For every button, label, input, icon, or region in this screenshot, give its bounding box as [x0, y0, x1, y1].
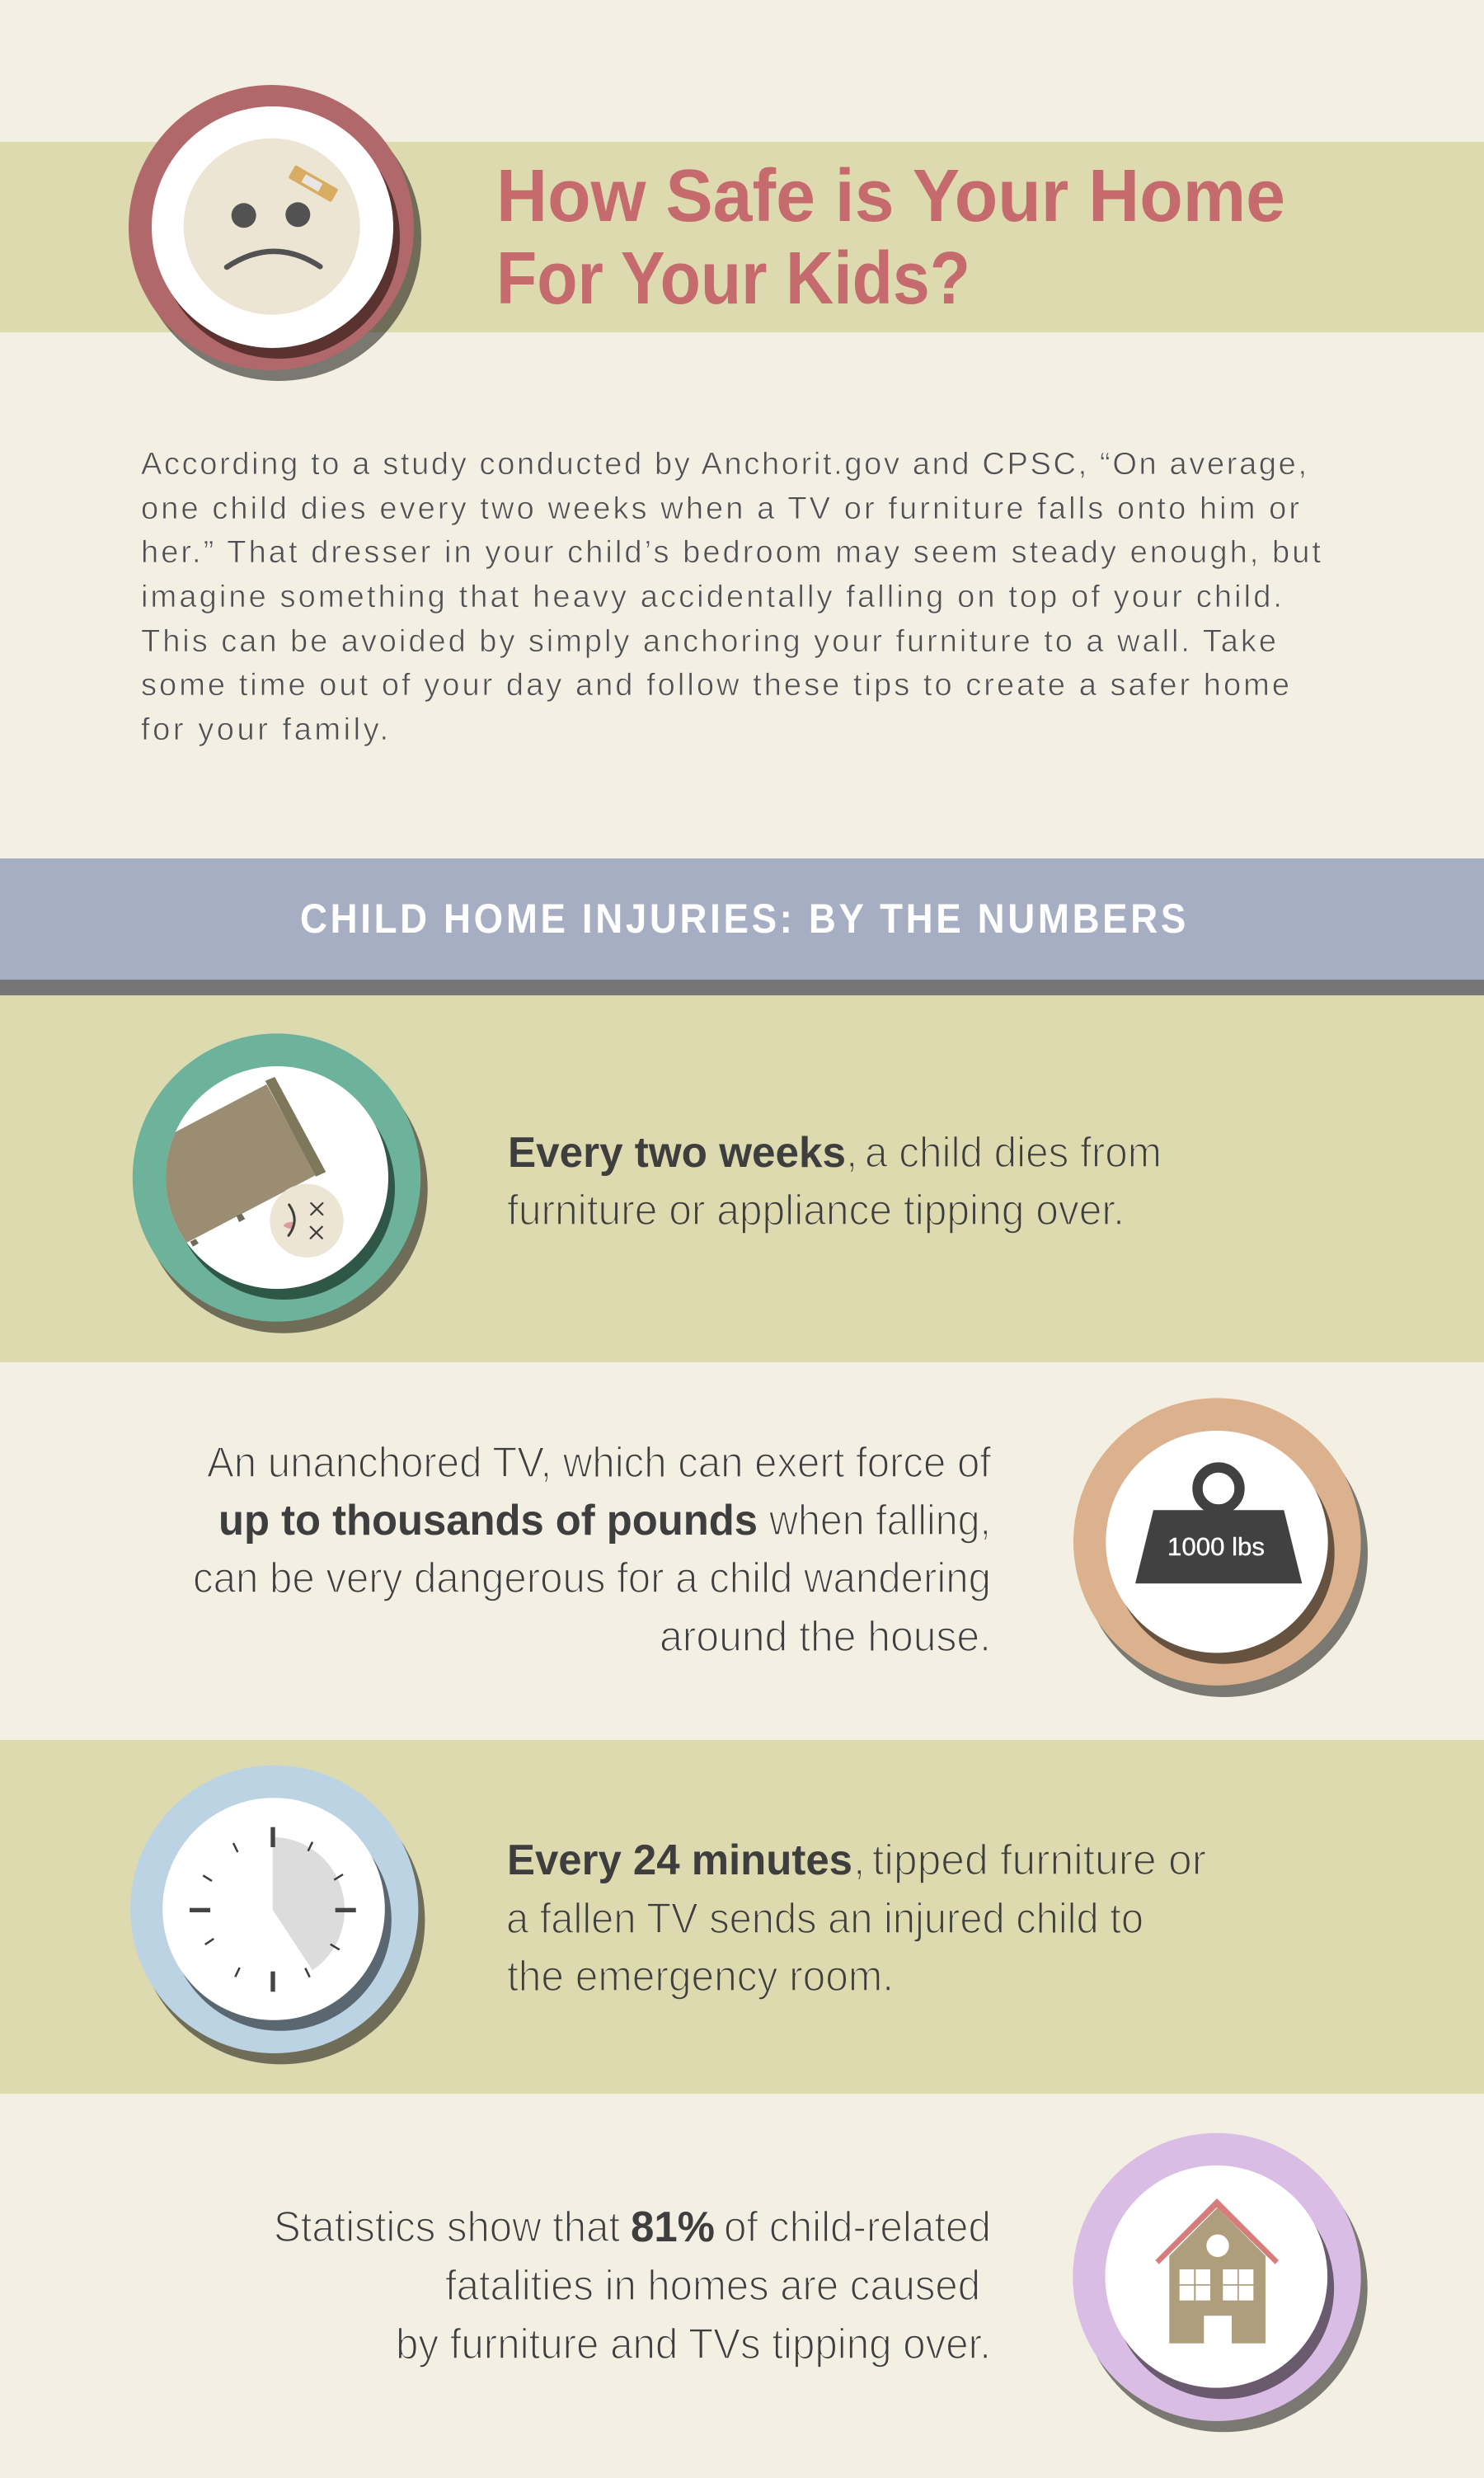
title	[496, 155, 1285, 320]
intro paragraph: one child dies every two weeks when a TV or furniture falls onto him or	[141, 491, 1299, 526]
section banner: CHILD HOME INJURIES: BY THE NUMBERS	[300, 896, 1189, 942]
text: every two weeks	[507, 1129, 1162, 1234]
text: every two weeks: furniture or appliance tipping over.	[507, 1187, 1125, 1234]
text: unanchored tv: when falling,	[768, 1497, 991, 1545]
text: every two weeks: Every two weeks	[508, 1129, 846, 1177]
panel: every two weeks	[0, 995, 1484, 1362]
text: statistics: by furniture and TVs tipping over.	[396, 2320, 991, 2368]
text: every two weeks: a child dies from	[865, 1129, 1162, 1177]
text: statistics	[274, 2203, 991, 2368]
text: every 24 minutes	[506, 1836, 1206, 2001]
text: every 24 minutes: Every 24 minutes	[507, 1836, 852, 1884]
text: unanchored tv: can be very dangerous for a child wandering	[193, 1554, 991, 1602]
panel: 81 percent statistic	[0, 2094, 1484, 2478]
text: every 24 minutes: a fallen TV sends an injured child to	[506, 1895, 1144, 1943]
intro paragraph: her.” That dresser in your child’s bedroom may seem steady enough, but	[141, 535, 1321, 570]
panel: force of falling tv	[0, 1362, 1484, 1740]
text: unanchored tv: An unanchored TV, which can exert force of	[207, 1439, 992, 1487]
section banner	[0, 858, 1484, 995]
intro paragraph: According to a study conducted by Anchorit.gov and CPSC, “On average,	[141, 447, 1307, 482]
intro paragraph: for your family.	[141, 712, 388, 747]
text: every 24 minutes: the emergency room.	[507, 1953, 894, 2001]
text: every 24 minutes: ,	[853, 1836, 865, 1884]
text: unanchored tv: up to thousands of pounds	[218, 1497, 758, 1545]
text: statistics: of child-related	[724, 2203, 991, 2251]
intro paragraph: some time out of your day and follow these tips to create a safer home	[141, 668, 1289, 703]
icon: tipped furniture over child	[105, 1033, 428, 1333]
icon: house	[1073, 2133, 1368, 2432]
intro paragraph: imagine something that heavy accidentally falling on top of your child.	[141, 580, 1282, 614]
icon: 1000 lbs weight: 1000 lbs	[1167, 1532, 1265, 1561]
text: unanchored tv	[193, 1439, 992, 1661]
text: statistics: fatalities in homes are caused	[445, 2262, 980, 2310]
text: statistics: 81%	[631, 2203, 715, 2251]
text: statistics: Statistics show that	[274, 2203, 621, 2251]
icon: sad face with bandage	[129, 85, 421, 381]
panel: every 24 minutes	[0, 1740, 1484, 2094]
text: unanchored tv: around the house.	[660, 1613, 991, 1661]
panel: header	[0, 85, 1484, 381]
intro paragraph: This can be avoided by simply anchoring your furniture to a wall. Take	[141, 624, 1276, 659]
text: every two weeks: ,	[846, 1129, 857, 1177]
title: For Your Kids?	[496, 237, 970, 320]
text: every 24 minutes: tipped furniture or	[872, 1836, 1206, 1884]
icon: 1000 lbs weight	[1073, 1398, 1368, 1697]
icon: clock	[130, 1766, 425, 2064]
intro paragraph	[141, 447, 1321, 747]
title: How Safe is Your Home	[496, 155, 1285, 237]
